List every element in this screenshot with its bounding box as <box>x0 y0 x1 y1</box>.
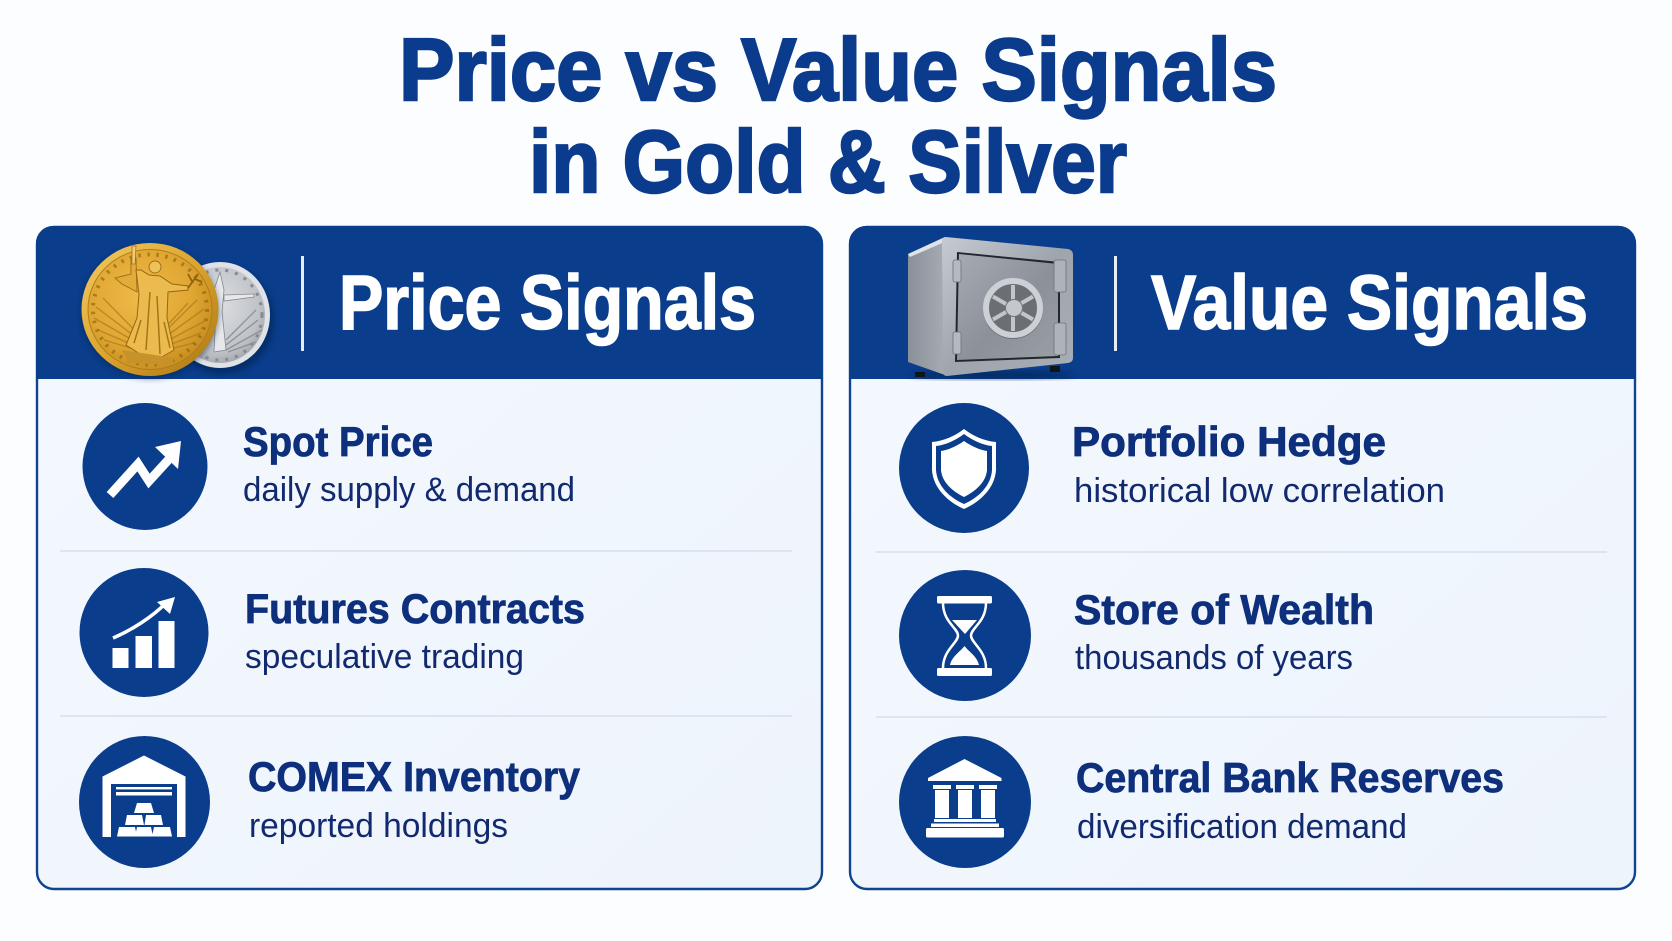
row: portfolio hedge: Portfolio Hedge <box>1072 418 1386 465</box>
row: store of wealth <box>899 570 1374 701</box>
row: store of wealth: thousands of years <box>1075 639 1353 677</box>
row: spot price: daily supply & demand <box>243 471 575 509</box>
panel: value signals <box>849 226 1636 889</box>
panel: price signals <box>36 226 822 889</box>
row: spot price: Spot Price <box>243 418 433 465</box>
row: spot price <box>82 403 575 530</box>
row: portfolio hedge <box>899 403 1445 533</box>
row: futures contracts: Futures Contracts <box>245 585 585 632</box>
title: in Gold & Silver <box>529 112 1127 211</box>
row: comex inventory: COMEX Inventory <box>248 753 581 800</box>
icon: bar chart with arrow <box>80 568 208 697</box>
heading: value signals: Value Signals <box>1151 260 1588 346</box>
icon: warehouse with gold bars <box>79 736 210 868</box>
icon: rising arrow <box>82 403 208 530</box>
header divider <box>301 256 304 351</box>
icon: shield <box>899 403 1029 533</box>
row: comex inventory: reported holdings <box>249 807 508 845</box>
header divider <box>1114 256 1117 351</box>
row: futures contracts: speculative trading <box>245 638 524 676</box>
row: portfolio hedge: historical low correlation <box>1074 472 1445 510</box>
heading: price signals: Price Signals <box>339 260 756 346</box>
icon: bank building <box>899 736 1031 868</box>
row: futures contracts <box>80 568 585 697</box>
title: Price vs Value Signals <box>399 20 1277 119</box>
icon: gold and silver coins <box>81 243 274 379</box>
title <box>399 20 1277 211</box>
row: central bank reserves: Central Bank Reserves <box>1076 754 1504 801</box>
row: store of wealth: Store of Wealth <box>1074 586 1374 633</box>
row: central bank reserves: diversification demand <box>1077 808 1407 846</box>
row: central bank reserves <box>899 736 1504 868</box>
icon: hourglass <box>899 570 1031 701</box>
icon: steel safe <box>908 237 1074 379</box>
row: comex inventory <box>79 736 581 868</box>
